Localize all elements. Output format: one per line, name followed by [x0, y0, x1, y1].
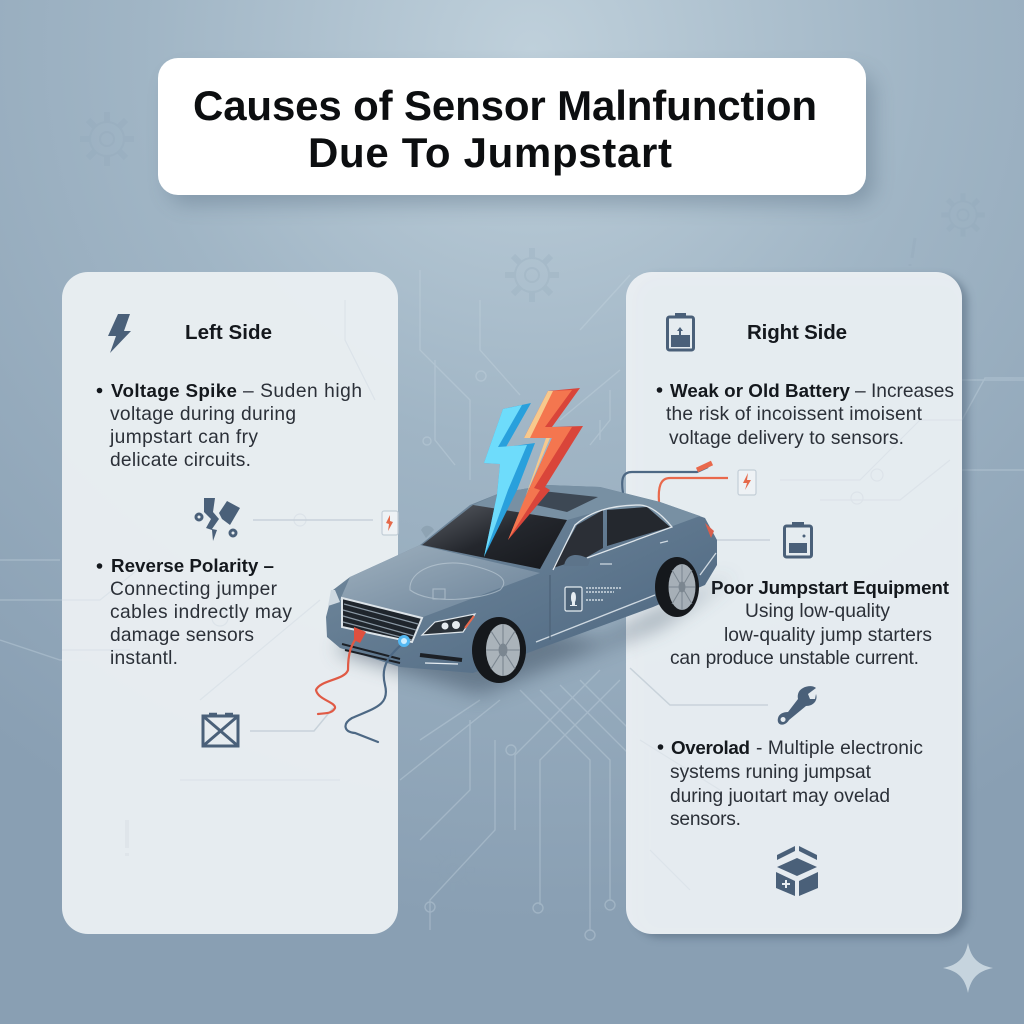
heading: left side: Left Side — [185, 321, 272, 344]
car shadow — [335, 575, 735, 695]
text: voltage spike: – Suden high — [243, 381, 362, 402]
panel circuit detail — [640, 420, 962, 890]
heading: right side: Right Side — [747, 321, 847, 344]
hood — [340, 545, 540, 617]
text: overload — [658, 737, 923, 830]
connector line — [700, 539, 770, 541]
text: poor jumpstart equipment: low-quality jump starters — [724, 625, 932, 646]
text: weak or old battery — [657, 380, 954, 449]
text: reverse polarity: cables indrectly may — [110, 602, 292, 623]
mirror — [564, 555, 590, 566]
top jumper cables — [622, 463, 728, 502]
rear wheel — [655, 557, 699, 617]
hood engine overlay — [410, 563, 504, 599]
panel: right side — [626, 272, 968, 938]
icon: wrench — [778, 686, 817, 725]
lightning bolts — [484, 388, 583, 557]
front wheel — [472, 617, 526, 683]
icon: broken bolt — [196, 498, 240, 541]
title card — [158, 58, 874, 204]
text: voltage spike: delicate circuits. — [110, 450, 251, 471]
text: overload: Overolad — [671, 737, 750, 758]
text: weak or old battery: Weak or Old Battery — [670, 380, 851, 401]
text: overload: systems runing jumpsat — [670, 762, 872, 783]
door badge — [565, 587, 622, 611]
panel: left side — [62, 272, 398, 934]
connector line — [253, 519, 373, 521]
icon: battery — [668, 313, 694, 350]
title: Due To Jumpstart — [308, 129, 672, 176]
text: poor jumpstart equipment: can produce unstable current. — [670, 648, 919, 669]
text: weak or old battery: – Increases — [855, 381, 954, 402]
blue bolt — [484, 403, 535, 557]
window chrome — [553, 505, 672, 570]
text: weak or old battery: voltage delivery to sensors. — [669, 428, 904, 449]
text: overload: during juoıtart may ovelad — [670, 786, 890, 807]
icon: lightning bolt — [108, 314, 131, 353]
text: reverse polarity — [97, 555, 292, 669]
side windows — [553, 507, 670, 568]
text: poor jumpstart equipment: Using low-quality — [745, 601, 890, 622]
lower bumper intake — [342, 644, 462, 663]
text: voltage spike: voltage during during — [110, 404, 296, 425]
front jumper cables — [316, 633, 403, 742]
icon: box — [776, 846, 818, 896]
background gears and marks — [80, 112, 985, 892]
car illustration — [316, 463, 735, 742]
grille — [342, 598, 422, 642]
rear lamp — [705, 523, 714, 538]
icon: sparkle — [943, 943, 993, 993]
icon: small charge tag — [738, 470, 756, 495]
sunroof — [527, 490, 598, 512]
cable clamps — [354, 627, 366, 643]
text: overload: sensors. — [670, 809, 741, 830]
windshield — [422, 505, 567, 569]
text: poor jumpstart equipment — [670, 577, 950, 669]
roof — [473, 485, 700, 527]
text: voltage spike: jumpstart can fry — [109, 427, 258, 448]
connector line — [250, 708, 333, 731]
door handles and side lines — [536, 541, 716, 642]
text: reverse polarity: instantl. — [110, 648, 178, 669]
orange bolt — [508, 388, 583, 540]
icon: low battery — [784, 522, 812, 557]
circuit traces — [0, 270, 1024, 940]
text: voltage spike — [97, 380, 362, 471]
car body — [326, 485, 717, 673]
text: poor jumpstart equipment: Poor Jumpstart Equipment — [711, 577, 950, 598]
text: reverse polarity: damage sensors — [110, 625, 254, 646]
panel circuit detail — [62, 300, 375, 856]
connector line — [630, 668, 768, 705]
text: voltage spike: Voltage Spike — [111, 380, 237, 401]
text: reverse polarity: Reverse Polarity – — [111, 555, 274, 576]
headlight — [422, 614, 475, 635]
text: reverse polarity: Connecting jumper — [110, 579, 278, 600]
icon: small charge tag left — [382, 511, 398, 535]
text: weak or old battery: the risk of incoissent imoisent — [666, 404, 923, 425]
title — [193, 82, 817, 176]
icon: crossed battery — [203, 714, 238, 746]
title: Causes of Sensor Malnfunction — [193, 82, 817, 129]
text: overload: - Multiple electronic — [756, 738, 923, 759]
